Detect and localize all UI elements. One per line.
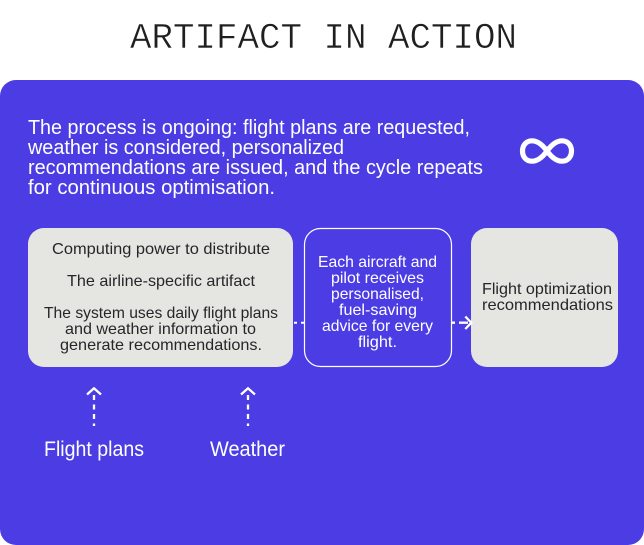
label: weather: Weather — [210, 438, 285, 461]
title: ARTIFACT IN ACTION — [130, 18, 517, 59]
panel: personalised advice: flight. — [358, 334, 397, 351]
label: flight plans: Flight plans — [44, 438, 144, 461]
panel: personalised advice: advice for every — [322, 318, 433, 335]
panel: personalised advice: fuel-saving — [339, 302, 417, 319]
panel: artifact inputs and computing: Computing power to distribute — [52, 241, 270, 258]
text block: process introduction — [27, 117, 483, 199]
arrow: connector from advice to recommendations — [452, 316, 471, 329]
panel: artifact inputs and computing — [28, 228, 293, 367]
panel: artifact inputs and computing: generate recommendations. — [60, 337, 262, 354]
panel: artifact inputs and computing: The airline-specific artifact — [67, 273, 256, 290]
panel: personalised advice: personalised, — [331, 286, 424, 303]
panel: artifact inputs and computing: and weather information to — [65, 321, 256, 338]
text block: process introduction: The process is ongoing: flight plans are requested, — [28, 117, 470, 139]
panel: personalised advice: Each aircraft and — [318, 254, 437, 271]
icon: infinity — [522, 141, 572, 161]
panel: flight optimization recommendations — [471, 228, 618, 367]
arrow: weather input — [241, 388, 255, 426]
panel: personalised advice: pilot receives — [331, 270, 424, 287]
text block: process introduction: for continuous optimisation. — [28, 177, 275, 199]
text block: process introduction: weather is considered, personalized — [27, 137, 344, 159]
panel: personalised advice — [304, 228, 452, 366]
text block: process introduction: recommendations are issued, and the cycle repeats — [28, 157, 483, 179]
panel: flight optimization recommendations: Flight optimization — [482, 281, 612, 298]
arrow: flight plans input — [87, 388, 101, 426]
panel: flight optimization recommendations: recommendations — [482, 297, 613, 314]
arrow: connector from artifact to advice — [294, 322, 304, 324]
panel: artifact inputs and computing: The system uses daily flight plans — [44, 305, 278, 322]
